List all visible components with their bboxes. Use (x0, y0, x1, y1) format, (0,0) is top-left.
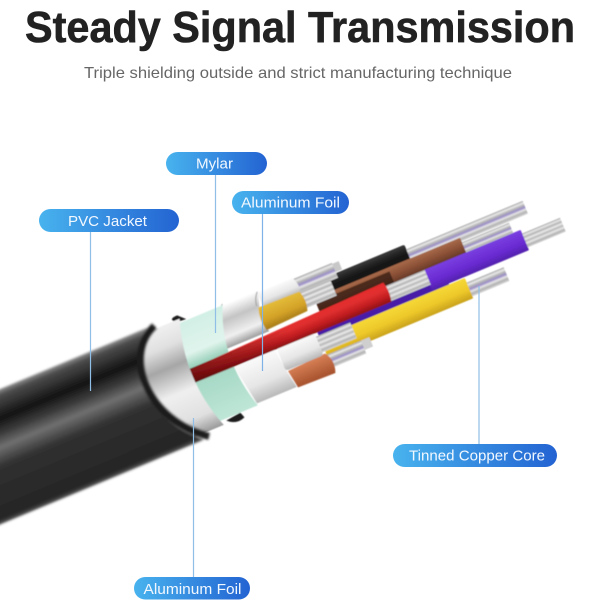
wire: white lower with silver strands (277, 319, 358, 371)
leader line: tinned copper core (478, 286, 480, 444)
wire: black with silver strands (328, 196, 528, 295)
leader line: mylar (214, 175, 216, 333)
aluminum foil shield (122, 319, 224, 449)
label: aluminum foil top: Aluminum Foil (241, 194, 340, 212)
wire: yellow with silver strands (320, 263, 510, 359)
leader line: aluminum foil top (262, 214, 264, 371)
pvc jacket (0, 322, 209, 541)
label: aluminum foil bottom (134, 577, 250, 600)
wire: mustard with silver strands (256, 278, 339, 331)
wire: white upper with silver strands (258, 259, 344, 308)
title: Steady Signal Transmission (25, 3, 575, 52)
label: mylar (166, 152, 267, 175)
label: tinned copper core (393, 444, 557, 467)
wire: orange with silver strands (287, 335, 377, 390)
label: aluminum foil bottom: Aluminum Foil (144, 581, 242, 598)
leader line: aluminum foil bottom (192, 418, 194, 577)
mylar shield (152, 298, 266, 438)
label: pvc jacket: PVC Jacket (68, 213, 148, 230)
leader line: pvc jacket (90, 232, 92, 391)
subtitle: Triple shielding outside and strict manufacturing technique (84, 65, 512, 82)
label: aluminum foil top (232, 191, 349, 214)
wire: brown with silver strands (314, 218, 514, 315)
inner aluminum foil (210, 289, 299, 406)
label: pvc jacket (39, 209, 179, 232)
label: mylar: Mylar (196, 156, 233, 172)
wire: red (176, 266, 431, 388)
wire: purple with silver strands (311, 214, 568, 339)
cable illustration (0, 165, 586, 541)
label: tinned copper core: Tinned Copper Core (409, 448, 545, 464)
